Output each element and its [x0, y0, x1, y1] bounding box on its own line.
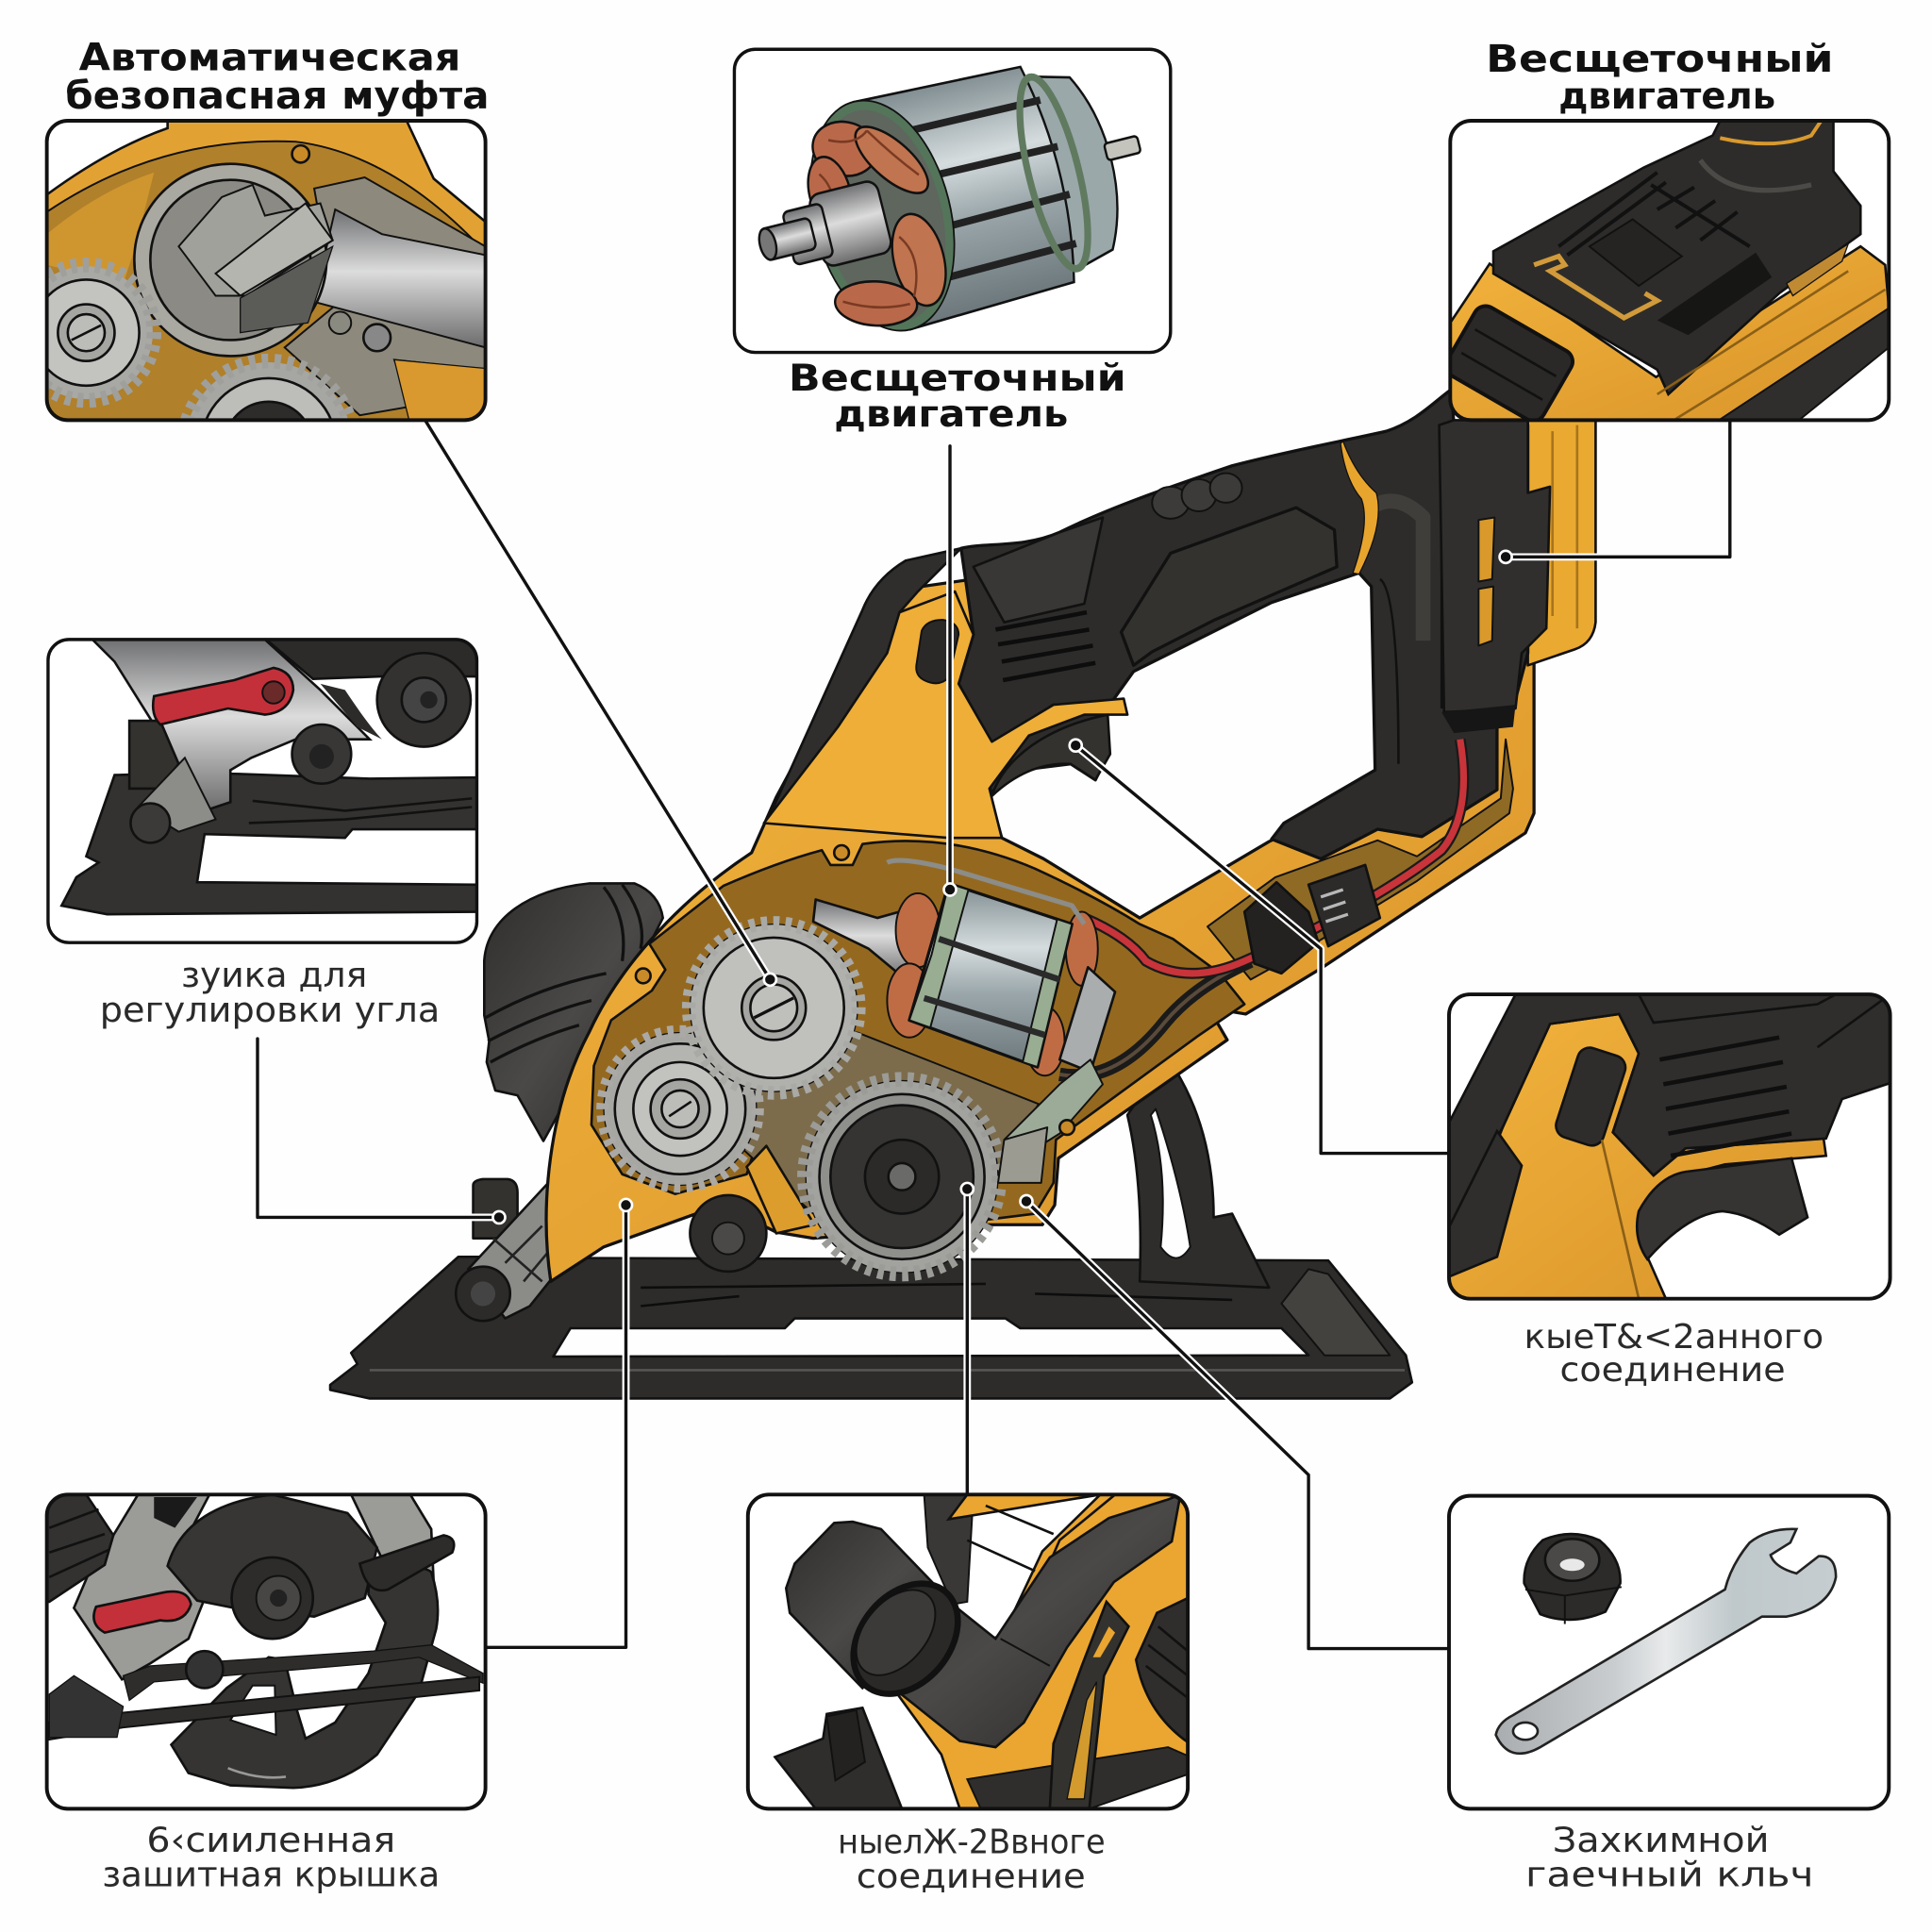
gear: blade flange: [805, 1079, 999, 1274]
handle grip: [958, 390, 1528, 858]
knob and ribs: [129, 721, 178, 789]
black battery plate: [1493, 121, 1860, 394]
trigger: [991, 715, 1110, 796]
yellow housing band: [896, 1494, 1188, 1808]
red lever: [93, 1591, 191, 1633]
icon: lock nut: [1524, 1534, 1622, 1624]
tube: [786, 1522, 949, 1688]
heading: top right: Весщеточный: [1486, 36, 1834, 81]
label: dust connection line 2: соединение: [857, 1857, 1086, 1896]
small knob: [186, 1651, 223, 1688]
panel: reinforced guard: [47, 1494, 486, 1808]
panel: automatic safety clutch: [45, 119, 488, 423]
elbow: [862, 1494, 1180, 1747]
gray arm: [92, 640, 370, 810]
roller bearing: [690, 1195, 766, 1272]
heading: automatic safety clutch line 2: безопасная муфта: [65, 73, 490, 118]
label: wrench line 2: гаечный кльч: [1525, 1855, 1814, 1895]
panel: trigger area: [1446, 994, 1890, 1299]
wire channel in arm: [1208, 740, 1513, 979]
label: bevel lever: зуика для: [181, 955, 367, 995]
black module on handle rear: [1440, 420, 1577, 733]
rear cap: [1025, 75, 1119, 266]
yellow hex around knob: [764, 591, 1127, 838]
bevel knob and rib bracket: [456, 1179, 569, 1321]
black shell: [1446, 994, 1890, 1232]
side knob: [916, 620, 958, 683]
icon: wrench: [1496, 1529, 1836, 1754]
front base rail: [48, 1677, 479, 1740]
hub: [232, 1557, 313, 1639]
screw bolts: [292, 145, 309, 162]
panel: bevel lever: [48, 640, 476, 942]
wiring: [1059, 740, 1463, 1075]
gear: second: [603, 1031, 758, 1187]
wire connector: [1244, 865, 1380, 974]
panel: battery mount: [1441, 121, 1889, 425]
heading: motor center line 2: двигатель: [834, 393, 1068, 436]
label: trigger connection line 2: соединение: [1560, 1351, 1786, 1390]
vent grille: [1452, 304, 1574, 419]
dark side strip: [1719, 308, 1889, 420]
gear plate: [740, 1029, 1039, 1214]
heading: automatic safety clutch: Автоматическая: [79, 34, 460, 79]
base: [61, 774, 476, 914]
gear left: [49, 266, 153, 400]
upper guard: [168, 1494, 377, 1617]
gear bottom: [191, 362, 347, 419]
front black body panel: [766, 548, 961, 823]
rear support arches: [1127, 1072, 1269, 1288]
heading: top right line 2: двигатель: [1558, 75, 1775, 118]
clutch housing yellow arc: [49, 123, 484, 245]
housing screw bosses: [636, 845, 1074, 1135]
hub and shaft: [808, 179, 893, 268]
front face and windings: [810, 100, 955, 332]
knob: [1553, 1044, 1628, 1149]
leader lines with dots: [258, 420, 1730, 1649]
panel: brushless motor: [732, 38, 1171, 359]
vents: [1659, 1038, 1791, 1156]
label: trigger connection: кыеТ&<2анного: [1524, 1318, 1824, 1357]
label: bevel lever line 2: регулировки угла: [100, 990, 440, 1030]
trigger: [1637, 1158, 1807, 1259]
label: guard: 6‹сииленная: [146, 1820, 395, 1860]
label: wrench: Захкимной: [1553, 1820, 1770, 1860]
dark back part: [924, 1494, 974, 1605]
motor in housing: [813, 860, 1115, 1183]
round hub: [377, 653, 471, 747]
clutch ring: [134, 164, 326, 356]
bevel knob base: [775, 1707, 902, 1808]
gray body: [74, 1494, 209, 1679]
red lever: [153, 668, 293, 724]
slot strap: [1050, 1602, 1128, 1808]
stator body: [854, 58, 1088, 329]
lower black strip: [967, 1747, 1188, 1808]
gray plates: [285, 177, 486, 415]
lever right: [359, 1535, 454, 1591]
small knob: [292, 724, 351, 784]
yellow housing and arm: [546, 579, 1534, 1281]
label: guard line 2: зашитная крышка: [102, 1855, 440, 1895]
dust port elbow: [484, 883, 663, 1141]
gear: upper: [689, 923, 858, 1093]
heading: motor center: Весщеточный: [789, 358, 1126, 400]
right motor part: [1136, 1598, 1188, 1742]
main tool: circular saw cutaway: [330, 390, 1595, 1398]
lower shroud yellow piece: [747, 1146, 814, 1233]
dust port stub: [47, 1494, 113, 1602]
lower guard ring: [172, 1565, 438, 1788]
top black block: [266, 640, 476, 679]
yellow body: [1446, 1014, 1826, 1299]
label: dust connection: ныелЖ-2Ввноге: [838, 1823, 1106, 1861]
internal cavity: [591, 841, 1244, 1221]
panel: clamp wrench: [1449, 1496, 1889, 1808]
panel: dust connection: [748, 1494, 1188, 1808]
yellow base: [1450, 246, 1889, 420]
yellow battery-mount strip: [1528, 420, 1595, 665]
rear base rail: [124, 1645, 483, 1700]
base plate: [330, 1257, 1412, 1398]
